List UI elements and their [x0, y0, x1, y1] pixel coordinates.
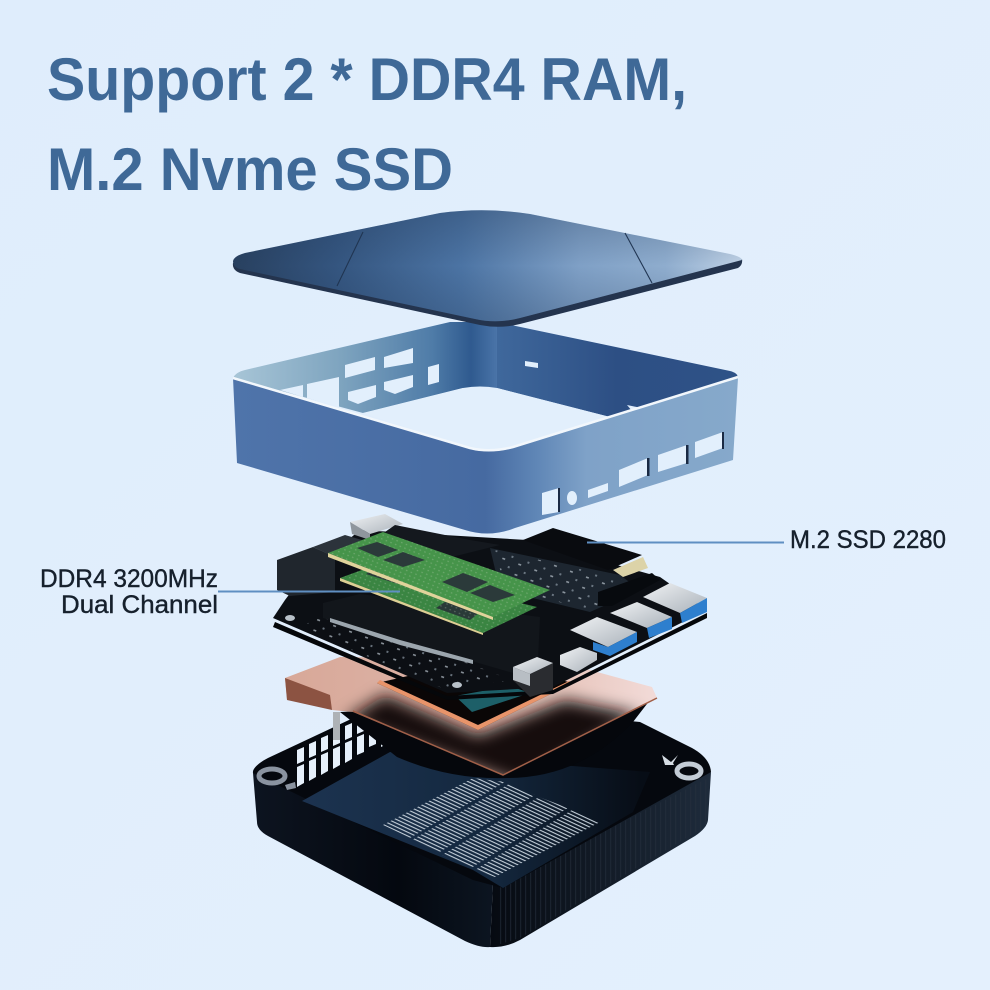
bottom case: [253, 696, 711, 947]
RAM module lower: [340, 567, 537, 635]
title: [47, 46, 687, 203]
memory slot block: [323, 594, 540, 673]
screw posts: [259, 755, 701, 790]
case outer walls: [253, 745, 711, 947]
SSD slot: [598, 573, 660, 606]
lid surface: [233, 210, 742, 321]
board screw holes: [285, 615, 462, 688]
M.2 SSD: [523, 528, 648, 577]
callout: M.2 SSD: M.2 SSD 2280: [790, 526, 946, 554]
USB ports: [570, 583, 707, 656]
copper heat plate: [285, 657, 657, 785]
top lid: [233, 210, 742, 327]
front face: [233, 378, 738, 534]
motherboard: [273, 514, 707, 700]
lid seams: [337, 232, 652, 286]
case inner rear: [253, 696, 711, 888]
fan shadow: [340, 700, 650, 778]
front ports: [513, 647, 597, 697]
chassis frame: [233, 322, 738, 534]
rear port cutouts: [280, 348, 646, 411]
plate edge: [353, 698, 657, 775]
processor die: [455, 686, 530, 712]
vent holes: [383, 778, 600, 877]
rear connectors: [385, 525, 500, 560]
callout: DDR4 RAM: Dual Channel: [61, 591, 218, 619]
standoff: [333, 712, 340, 740]
grill slots: [297, 717, 385, 787]
plate body: [285, 657, 657, 775]
callout: DDR4 RAM: [40, 565, 400, 619]
plate shadow: [340, 676, 641, 774]
case floor: [302, 752, 650, 888]
processor die frame: [377, 680, 573, 730]
inner walls: [233, 322, 497, 413]
ethernet ports: [277, 514, 403, 596]
circuit board: [273, 530, 707, 693]
lid rim: [233, 259, 742, 327]
title: M.2 Nvme SSD: [47, 136, 453, 203]
callout: DDR4 RAM: DDR4 3200MHz: [40, 565, 218, 593]
title: Support 2 * DDR4 RAM,: [47, 46, 687, 113]
front port cutouts: [542, 432, 723, 515]
RAM module upper: [328, 532, 550, 620]
inner opening: [363, 386, 610, 450]
top rim highlight: [233, 377, 738, 450]
